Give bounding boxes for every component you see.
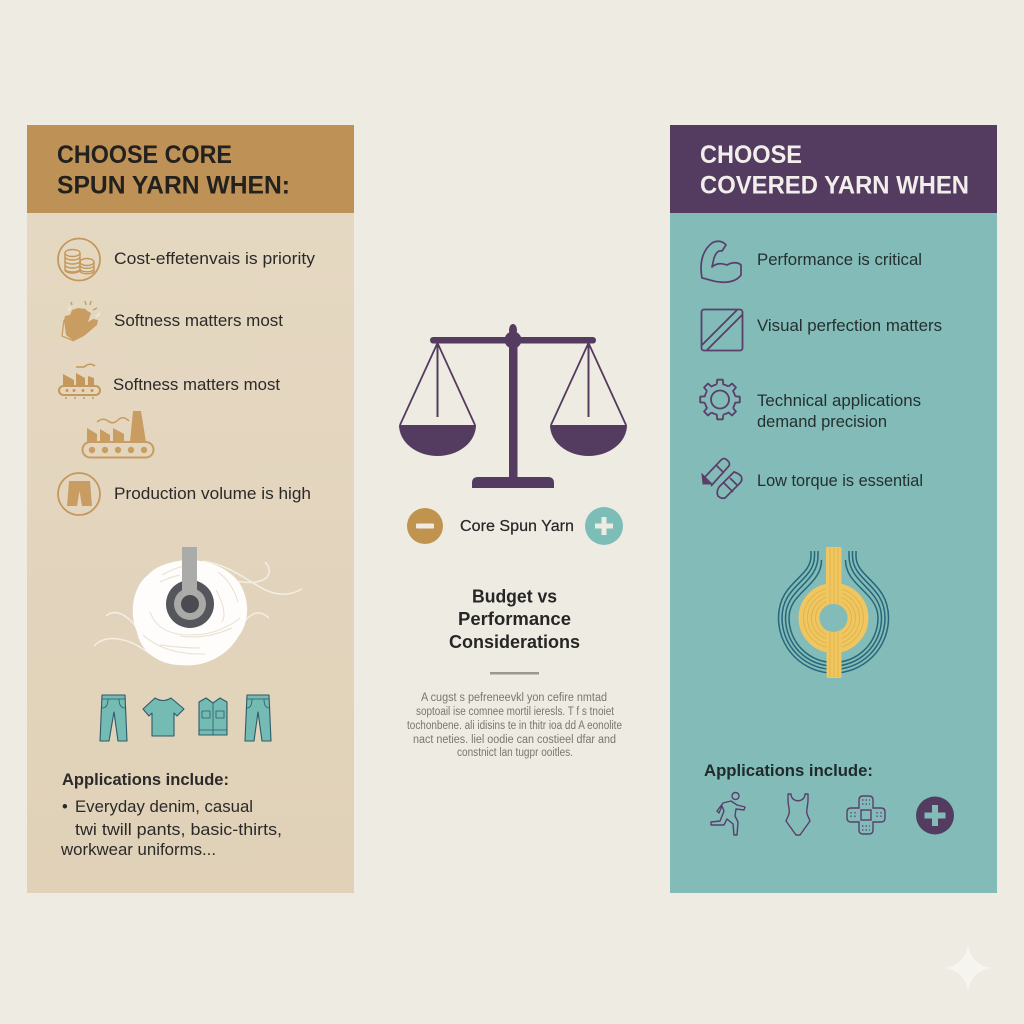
illustration: spun yarn ball (94, 547, 302, 665)
icon: gear (700, 380, 740, 419)
text: cost priority: Cost-effetenvais is priority (114, 250, 316, 268)
right header banner: CHOOSE (700, 141, 802, 169)
icon: runner (711, 792, 745, 835)
text: description paragraph: nact neties. liel oodie can costieel dfar and (413, 734, 616, 746)
icon: shorts (58, 473, 100, 515)
heading: budget vs performance (449, 586, 580, 652)
icon: coins (58, 238, 100, 280)
text: description paragraph: constnict lan tugpr ooitles. (457, 747, 573, 759)
text: applications include: Applications include: (704, 762, 873, 780)
text: softness matters repeat: Softness matters most (113, 376, 280, 394)
text: description paragraph: soptoail ise comnee mortil ieresls. T f s tnoiet (416, 706, 615, 718)
text: production volume: Production volume is high (114, 485, 311, 503)
text: description paragraph: tochonbene. ali idisins te in thitr ioa dd A eonolite (407, 720, 622, 732)
text: applications list: twi twill pants, basic-thirts, (75, 821, 282, 839)
icon: swimsuit (786, 794, 810, 835)
text: applications list: workwear uniforms... (60, 841, 216, 859)
text: applications list: Applications include: (62, 771, 229, 789)
text: performance critical: Performance is critical (757, 251, 922, 269)
panel: choose covered yarn (670, 125, 997, 893)
text: description paragraph (407, 692, 622, 759)
heading: budget vs performance: Budget vs (472, 586, 557, 606)
label: core spun yarn: Core Spun Yarn (460, 518, 574, 535)
text: technical applications (757, 392, 921, 431)
icon: bandage cross (847, 796, 885, 834)
text: visual perfection: Visual perfection matters (757, 317, 942, 335)
text: technical applications: Technical applications (757, 392, 921, 410)
icons: garments (100, 695, 271, 741)
text: applications list: • (62, 798, 68, 816)
icon: minus badge (407, 508, 443, 544)
text: applications list (60, 771, 282, 859)
icon: flexed arm (701, 241, 741, 282)
icon: large factory (82, 411, 154, 458)
heading: budget vs performance: Considerations (449, 632, 580, 652)
left header banner: CHOOSE CORE (57, 141, 232, 169)
text: description paragraph: A cugst s pefreneevkl yon cefire nmtad (421, 692, 607, 704)
icon: sparkle watermark (944, 944, 992, 992)
text: softness matters: Softness matters most (114, 312, 283, 330)
icon: plus circle (916, 796, 954, 834)
icon: split square (702, 310, 742, 350)
icon: soft hand (62, 301, 100, 341)
left header banner (27, 125, 354, 213)
left header banner: SPUN YARN WHEN: (57, 172, 290, 200)
right header banner (670, 125, 997, 213)
icon: low torque capsules (702, 458, 742, 498)
illustration: covered yarn rings (778, 547, 888, 678)
panel: choose core spun yarn (27, 125, 354, 893)
icon: balance scale (399, 324, 627, 488)
icon: plus badge (585, 507, 623, 545)
text: low torque: Low torque is essential (757, 472, 923, 490)
heading: budget vs performance: Performance (458, 609, 571, 629)
text: technical applications: demand precision (757, 413, 887, 431)
text: applications list: Everyday denim, casual (75, 798, 253, 816)
right header banner: COVERED YARN WHEN (700, 172, 969, 200)
panel: center comparison (399, 324, 627, 759)
icon: small factory (59, 364, 100, 399)
